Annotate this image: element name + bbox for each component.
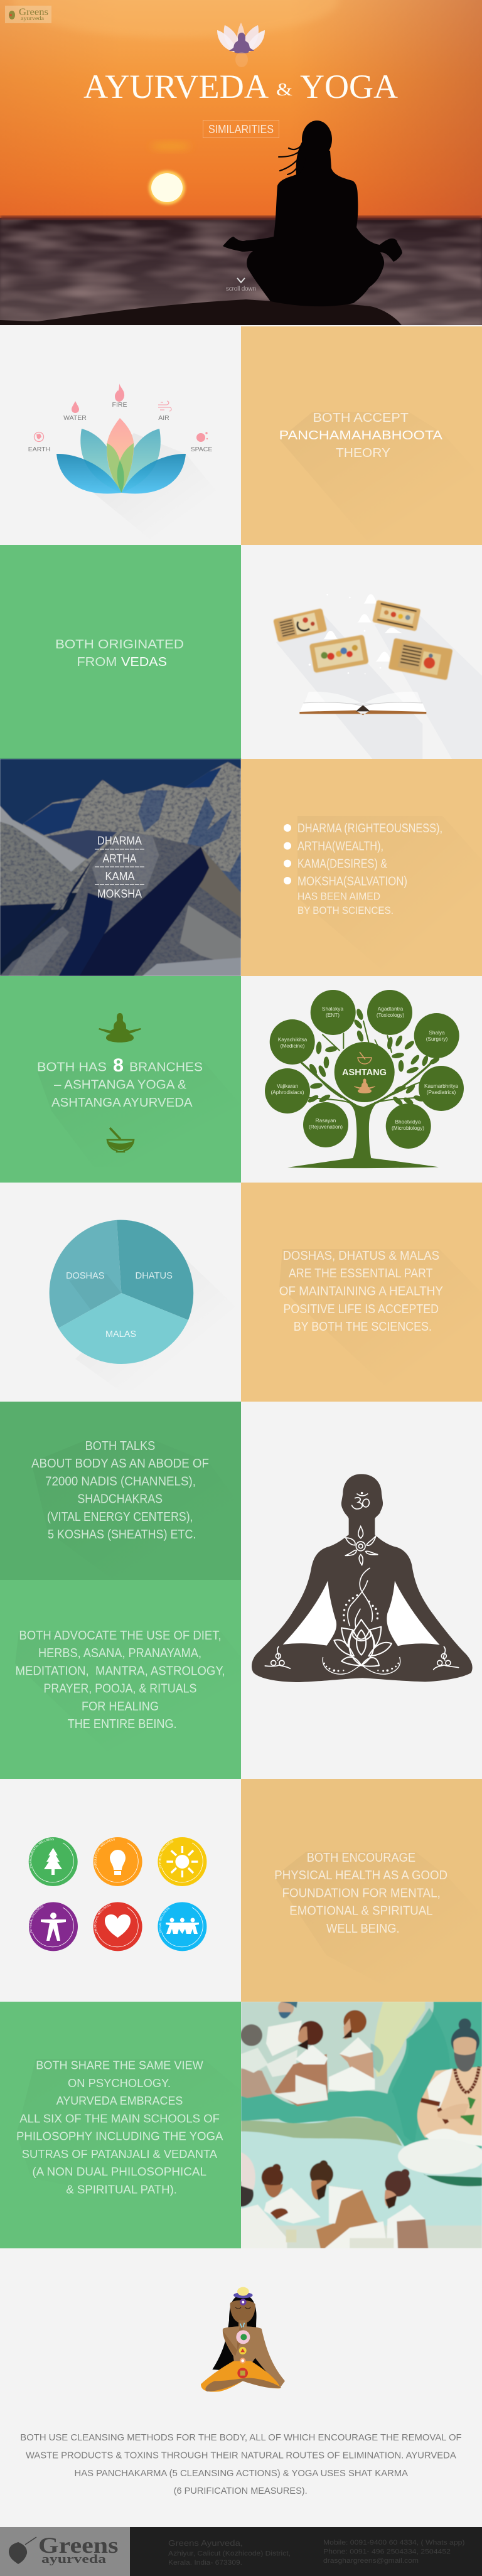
panel: psychology text: & SPIRITUAL PATH). <box>66 2183 177 2196</box>
element: water: WATER <box>63 414 87 422</box>
bullets <box>284 824 291 884</box>
panel: doshas text <box>241 1183 482 1402</box>
panel: doshas text: OF MAINTAINING A HEALTHY <box>279 1284 443 1298</box>
lotus symbol <box>334 1619 392 1666</box>
footer logo: ayurveda <box>41 2553 107 2566</box>
panel: goals list <box>241 759 482 976</box>
branch labels: (Surgery) <box>426 1036 448 1042</box>
cleansing text: HAS PANCHAKARMA (5 CLEANSING ACTIONS) & YOGA USES SHAT KARMA <box>74 2468 408 2479</box>
footer contact: Phone: 0091- 496 2504334, 2504452 <box>323 2548 451 2556</box>
figure with chakras <box>201 2287 285 2392</box>
panel: advocate text: THE ENTIRE BEING. <box>68 1717 177 1731</box>
logo badge: ayurveda <box>21 15 44 21</box>
arm gaps <box>283 1580 336 1646</box>
panel: vedas text: FROM <box>77 655 117 669</box>
wellness badge: physical <box>29 1902 78 1951</box>
panel: advocate text: HERBS, ASANA, PRANAYAMA, <box>38 1646 201 1660</box>
footer address: Kerala. India- 673309. <box>168 2559 242 2567</box>
clouds and sparkles <box>309 594 403 674</box>
panel: body abode text: BOTH TALKS <box>85 1439 155 1453</box>
panel: psychology text: AYURVEDA EMBRACES <box>56 2095 183 2107</box>
panel: psychology text: (A NON DUAL PHILOSOPHICAL <box>32 2165 206 2178</box>
manuscripts <box>273 600 453 680</box>
lotus long shadow <box>88 433 241 545</box>
wellness badge: spiritual: SPIRITUAL WELLNESS <box>159 1840 173 1868</box>
panel: cleansing section <box>0 2248 482 2527</box>
scroll down hint <box>226 278 256 292</box>
wellness badge: intellectual: INTELLECTUAL WELLNESS <box>94 1838 115 1868</box>
icon: mortar and pestle <box>107 1128 134 1152</box>
main sage <box>398 2019 482 2174</box>
panel: physical health text: BOTH ENCOURAGE <box>307 1851 415 1865</box>
panel: 8 branches text: ASHTANGA AYURVEDA <box>51 1096 193 1110</box>
panel: doshas text: ARE THE ESSENTIAL PART <box>289 1267 433 1280</box>
element: space <box>191 432 212 453</box>
panel: physical health text: WELL BEING. <box>326 1922 400 1936</box>
panel: psychology text: BOTH SHARE THE SAME VIEW <box>36 2059 203 2072</box>
similarities tag <box>203 121 279 138</box>
panel: panchamahabhoota text <box>241 326 482 545</box>
four goals labels: ARTHA <box>103 852 137 865</box>
panel: goals list: KAMA(DESIRES) & <box>297 857 388 871</box>
panel: goals list: ARTHA(WEALTH), <box>297 840 383 854</box>
footer <box>0 2527 482 2576</box>
panel: body abode text: SHADCHAKRAS <box>77 1493 163 1506</box>
panel: flying manuscripts and book <box>241 545 482 759</box>
panel: goals list: MOKSHA(SALVATION) <box>297 875 407 889</box>
pie chart: MALAS <box>105 1329 136 1339</box>
branch labels: (Aphrodisiacs) <box>270 1089 304 1095</box>
branch labels: Shalya <box>429 1029 445 1036</box>
footer logo: Greens <box>38 2533 118 2558</box>
wellness badge: environmental <box>29 1837 78 1886</box>
branch labels: (Paediatrics) <box>427 1089 456 1095</box>
panel: doshas text: BY BOTH THE SCIENCES. <box>294 1320 432 1334</box>
bottom group of sages <box>228 2152 482 2248</box>
branches <box>302 1021 431 1107</box>
panel: psychology text: ON PSYCHOLOGY. <box>68 2077 171 2090</box>
rock <box>0 299 402 325</box>
panel: goals list: DHARMA (RIGHTEOUSNESS), <box>297 822 442 835</box>
panel: advocate text: FOR HEALING <box>82 1700 159 1714</box>
panel: body abode text: ABOUT BODY AS AN ABODE OF <box>31 1457 209 1471</box>
panel: body abode text <box>0 1402 241 1580</box>
branch labels: (Rejuvenation) <box>309 1124 343 1130</box>
pie chart <box>50 1220 193 1364</box>
branch labels: (Toxicology) <box>377 1012 404 1018</box>
branch labels: (Medicine) <box>281 1043 305 1049</box>
sun reflection in the sky <box>151 142 191 150</box>
om symbol <box>352 1493 369 1509</box>
ashtang centre <box>342 1052 387 1093</box>
branch labels: (ENT) <box>326 1012 340 1018</box>
panel: body abode text: (VITAL ENERGY CENTERS), <box>47 1510 193 1524</box>
scroll down hint: scroll down <box>226 286 256 292</box>
element: fire <box>112 384 127 409</box>
panel: psychology text: SUTRAS OF PATANJALI & VEDANTA <box>22 2148 217 2160</box>
title: YOGA <box>300 68 398 105</box>
panel: panchamahabhoota text: BOTH ACCEPT <box>313 411 409 425</box>
panel: 8 branches text: – ASHTANGA YOGA & <box>54 1078 187 1092</box>
panel: body abode text: 5 KOSHAS (SHEATHS) ETC. <box>48 1528 196 1542</box>
panel: 8 branches text <box>0 976 241 1183</box>
top group of sages <box>240 2000 375 2106</box>
cleansing text: WASTE PRODUCTS & TOXINS THROUGH THEIR NATURAL ROUTES OF ELIMINATION. AYURVEDA <box>26 2450 456 2461</box>
panel: physical health text: FOUNDATION FOR MENTAL, <box>282 1887 441 1901</box>
book <box>299 692 426 715</box>
panel: psychology text: ALL SIX OF THE MAIN SCHOOLS OF <box>19 2112 220 2125</box>
element: air <box>158 401 171 422</box>
panel: chakra body illustration <box>241 1402 482 1779</box>
panel: advocate text: PRAYER, POOJA, & RITUALS <box>44 1682 196 1696</box>
triple spirals on knees <box>265 1646 459 1670</box>
panel: doshas text: POSITIVE LIFE IS ACCEPTED <box>284 1302 439 1316</box>
element: earth <box>28 432 50 453</box>
footer logo <box>0 2527 130 2576</box>
panel: panchamahabhoota text: PANCHAMAHABHOOTA <box>279 429 443 443</box>
element: earth: EARTH <box>28 446 50 453</box>
logo badge <box>5 6 51 23</box>
panel: advocate text <box>0 1580 241 1779</box>
similarities tag: SIMILARITIES <box>208 123 274 136</box>
panel: body abode text: 72000 NADIS (CHANNELS), <box>45 1475 196 1489</box>
silhouette of meditating woman <box>223 121 402 306</box>
pie chart: DHATUS <box>136 1270 173 1281</box>
panel: physical health text: EMOTIONAL & SPIRITUAL <box>289 1904 433 1918</box>
footer address: Azhiyur, Calicut (Kozhicode) District, <box>168 2550 291 2558</box>
title: & <box>276 80 292 100</box>
element: air: AIR <box>158 414 169 422</box>
branch labels: Kayachikitsa <box>278 1036 308 1043</box>
panel: wellness icons <box>29 1837 207 1951</box>
panel: five elements lotus <box>0 326 241 545</box>
manuscript long shadows <box>276 615 422 759</box>
branch labels <box>270 1006 458 1131</box>
panel: vedas text: BOTH ORIGINATED <box>55 638 184 652</box>
panel: advocate text: BOTH ADVOCATE THE USE OF DIET, <box>19 1629 222 1643</box>
icon: setting sun <box>149 171 185 205</box>
wellness badge: environmental: ENVIRONMENTAL WELLNESS <box>29 1838 54 1868</box>
four goals labels: KAMA <box>105 870 134 883</box>
panel: advocate text: MEDITATION, MANTRA, ASTROLOGY, <box>15 1665 225 1678</box>
panel: ashtang tree <box>241 976 482 1183</box>
panel: 8 branches text: BOTH HAS <box>37 1061 107 1075</box>
footer contact <box>323 2539 464 2565</box>
footer contact: Mobile: 0091-9400 60 4334, ( Whats app) <box>323 2539 464 2546</box>
wellness badge: social <box>158 1902 207 1951</box>
icon: lotus with meditator <box>217 23 265 67</box>
panel: 8 branches text: 8 <box>113 1055 124 1076</box>
spine flame <box>348 1568 372 1627</box>
wellness badge: physical: PHYSICAL WELLNESS <box>29 1906 44 1933</box>
leaves <box>307 1008 441 1107</box>
logo badge: Greens <box>19 7 48 18</box>
cleansing text <box>20 2432 462 2496</box>
title: AYURVEDA <box>83 68 269 105</box>
four goals labels: DHARMA <box>97 835 142 847</box>
panel: vedas text: VEDAS <box>121 655 167 669</box>
panel: doshas pie chart <box>0 1183 241 1402</box>
panel: physical health text <box>241 1779 482 2002</box>
icon: lotus flower <box>56 418 186 493</box>
tree trunk and ground <box>287 1103 439 1168</box>
panel: physical health text: PHYSICAL HEALTH AS A GOOD <box>274 1869 447 1882</box>
title <box>83 68 398 105</box>
wellness badge: intellectual <box>93 1837 142 1886</box>
sun symbol <box>345 1527 378 1565</box>
element: space: SPACE <box>191 446 212 453</box>
wellness badge: emotional <box>93 1902 142 1951</box>
icon: yoga figure <box>99 1013 141 1043</box>
panel: hero <box>0 0 482 325</box>
panel: doshas text: DOSHAS, DHATUS & MALAS <box>282 1249 439 1263</box>
footer address: Greens Ayurveda, <box>168 2538 243 2548</box>
branch circles <box>265 990 464 1149</box>
panel: goals list: BY BOTH SCIENCES. <box>297 904 394 916</box>
painting background <box>241 2002 482 2248</box>
four goals labels: MOKSHA <box>97 888 142 900</box>
branch labels: Agadtantra <box>378 1006 404 1012</box>
panel: mountain photo <box>0 759 241 976</box>
panel: psychology text: PHILOSOPHY INCLUDING THE YOGA <box>16 2130 223 2143</box>
ashtang centre: ASHTANG <box>342 1067 387 1078</box>
panel: goals list: HAS BEEN AIMED <box>297 891 380 903</box>
panel: 8 branches text: BRANCHES <box>129 1061 203 1075</box>
four goals labels <box>95 835 145 900</box>
panel: sages painting <box>228 2000 482 2248</box>
pie chart: DOSHAS <box>66 1270 104 1281</box>
wellness badge: emotional: EMOTIONAL WELLNESS <box>94 1904 110 1933</box>
panel: vedas text <box>0 545 241 759</box>
wellness badge: social: SOCIAL WELLNESS <box>159 1907 169 1933</box>
branch labels: Shalakya <box>322 1006 343 1012</box>
branch labels: Vajikaran <box>277 1083 298 1089</box>
cleansing text: (6 PURIFICATION MEASURES). <box>174 2486 308 2496</box>
body silhouette <box>252 1474 473 1682</box>
element: fire: FIRE <box>112 401 127 409</box>
wellness badge: spiritual <box>158 1837 207 1886</box>
element: water <box>63 401 87 422</box>
footer address <box>168 2538 291 2567</box>
cleansing text: BOTH USE CLEANSING METHODS FOR THE BODY, ALL OF WHICH ENCOURAGE THE REMOVAL OF <box>20 2432 462 2443</box>
panel: psychology text <box>0 2002 241 2248</box>
branch labels: Bhootvidya <box>395 1119 421 1125</box>
branch labels: (Microbiology) <box>392 1125 424 1131</box>
branch labels: Kaumarbhritya <box>424 1083 458 1089</box>
branch labels: Rasayan <box>316 1117 336 1124</box>
footer contact: drasghargreens@gmail.com <box>323 2557 419 2565</box>
panel: panchamahabhoota text: THEORY <box>336 446 390 460</box>
